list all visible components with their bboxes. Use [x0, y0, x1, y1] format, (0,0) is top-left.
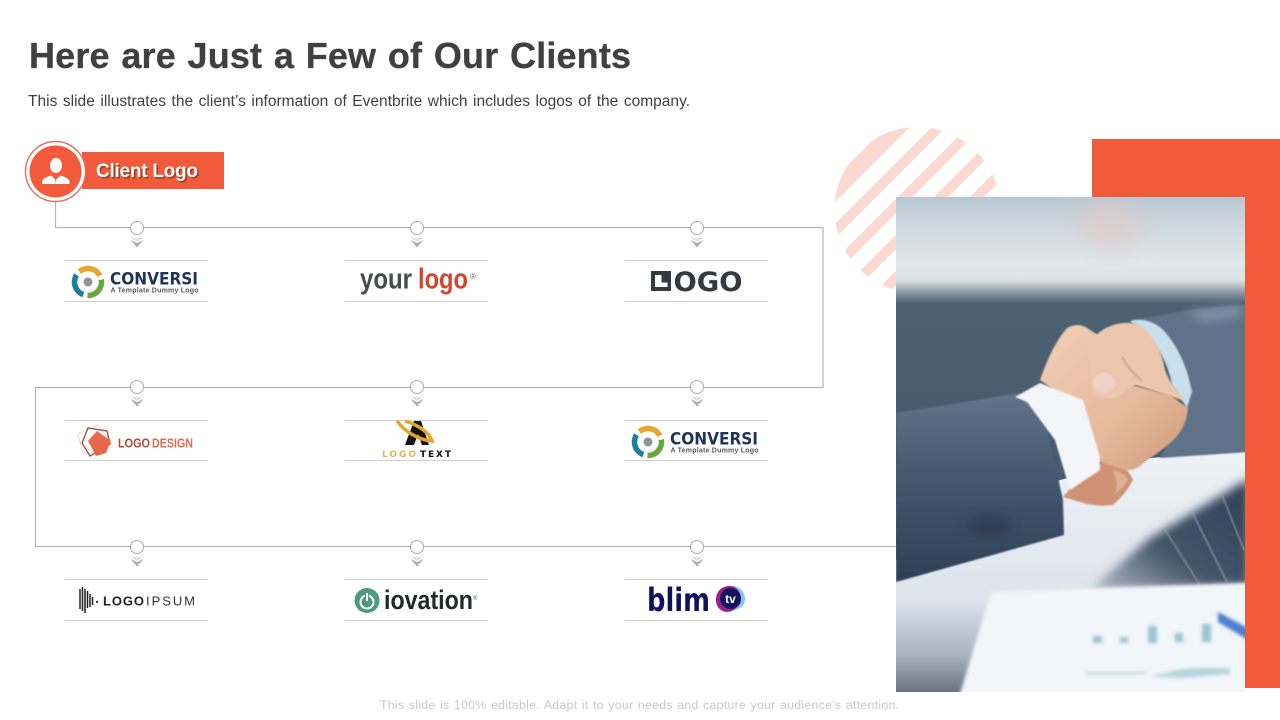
- left suit: [896, 393, 1064, 582]
- title: Here are Just a Few of Our Clients: [29, 35, 631, 76]
- logo: blim tv: tv: [725, 592, 736, 606]
- logo: iovation: ®: [473, 595, 478, 602]
- logo: Conversi (row 2): A Template Dummy Logo: [670, 448, 758, 454]
- decorative striped circle: [835, 128, 996, 289]
- logo: Logo Ipsum: IPSUM: [146, 594, 195, 608]
- logo: your logo: ®: [470, 272, 476, 281]
- connector line: [36, 200, 896, 546]
- logo: Logo Design: LOGO: [118, 436, 150, 450]
- orange accent block: [1092, 139, 1280, 688]
- logo: Conversi (row 1): A Template Dummy Logo: [110, 288, 198, 294]
- lower fingers: [1063, 460, 1133, 506]
- logo: LOGO square: OGO: [674, 267, 742, 298]
- logo: Logo Design: [78, 425, 193, 456]
- footer note: This slide is 100% editable. Adapt it to your needs and capture your audience’s attention.: [380, 698, 899, 712]
- logo: Logo Text: [382, 421, 452, 460]
- logo: Logo Text: LOGO: [382, 450, 416, 460]
- logo: your logo: [360, 264, 476, 296]
- logo frame rules: [65, 260, 768, 620]
- logo: Logo Ipsum: LOGO: [103, 594, 144, 608]
- icon: person: [42, 158, 70, 184]
- client logo badge: [26, 142, 224, 202]
- connector nodes and chevrons: [130, 222, 704, 566]
- logo: Conversi (row 1): [69, 263, 198, 301]
- right cuff: [1130, 320, 1192, 408]
- right sleeve: [1130, 304, 1250, 458]
- logo: your logo: your: [360, 264, 412, 296]
- thumb: [1088, 323, 1187, 402]
- logo: Conversi (row 2): [629, 423, 758, 461]
- thumbnail: [1093, 373, 1115, 393]
- blurred highlight in backdrop: [1075, 200, 1145, 250]
- left hand: [1040, 325, 1188, 470]
- logo: blim tv: blim: [647, 581, 710, 619]
- logo: Logo Ipsum: [80, 587, 195, 613]
- logo: iovation: iovation: [384, 585, 473, 615]
- logo: Conversi (row 1): CONVERSI: [110, 270, 198, 288]
- subtitle: This slide illustrates the client’s information of Eventbrite which includes logos of the company.: [28, 93, 690, 110]
- table surface: [896, 450, 1250, 700]
- dark table reflection: [1090, 478, 1250, 590]
- client logo badge: Client Logo: [96, 161, 198, 182]
- logo: your logo: logo: [418, 264, 468, 296]
- logo: Logo Text: TEXT: [420, 450, 452, 460]
- left cuff: [1015, 383, 1100, 490]
- photo: business handshake: [896, 197, 1250, 700]
- blurred chart marks: [1085, 624, 1230, 678]
- logo: Logo Design: DESIGN: [152, 436, 193, 450]
- client logo badge: Client Logo: [98, 162, 200, 184]
- logo: Conversi (row 2): CONVERSI: [670, 430, 758, 448]
- blurred document: [958, 583, 1250, 700]
- blurred pen: [1218, 612, 1248, 640]
